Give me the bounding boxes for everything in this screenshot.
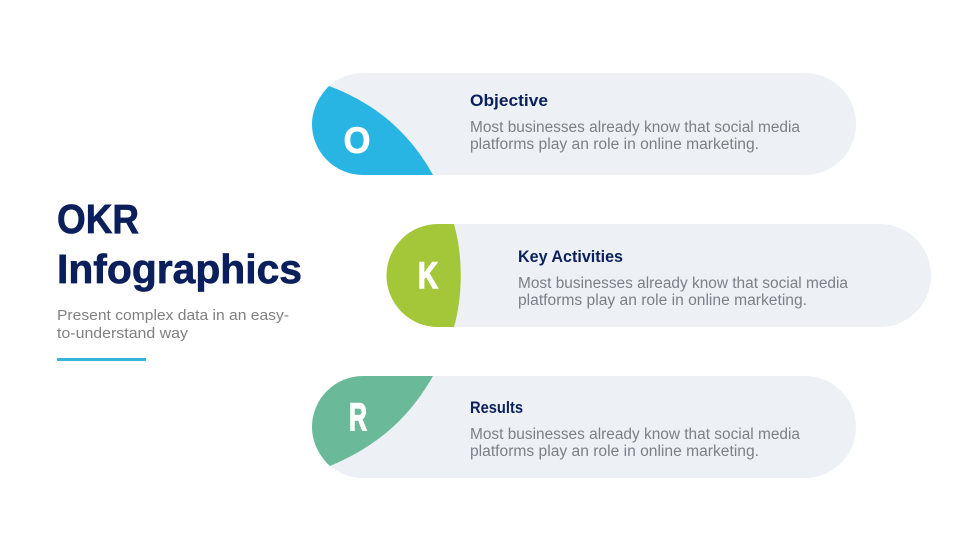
body text: objective: Most businesses already know that social media [470, 119, 800, 136]
panel: key activities [386, 224, 931, 327]
icon: K segment [386, 224, 461, 327]
body text: results [470, 426, 800, 460]
icon: R segment [312, 376, 433, 466]
accent underline [57, 358, 146, 361]
title [57, 196, 302, 292]
body text: results: platforms play an role in online marketing. [470, 443, 759, 460]
body text: objective [470, 119, 800, 153]
body text: key activities: platforms play an role in online marketing. [518, 292, 807, 309]
pill background: results [312, 376, 856, 478]
panel: results [312, 376, 856, 478]
panel: objective [312, 73, 856, 175]
body text: key activities [518, 275, 848, 309]
icon: O segment [312, 86, 433, 175]
pill background: key activities [387, 224, 931, 327]
subtitle [57, 307, 289, 342]
pill background: objective [312, 73, 856, 175]
body text: key activities: Most businesses already know that social media [518, 275, 848, 292]
letter R: R [349, 396, 367, 439]
letter K: K [418, 255, 438, 296]
subtitle: Present complex data in an easy- [57, 307, 289, 324]
heading: objective: Objective [470, 91, 548, 110]
heading: results: Results [470, 398, 523, 417]
letter O: O [344, 120, 370, 161]
body text: results: Most businesses already know that social media [470, 426, 800, 443]
body text: objective: platforms play an role in online marketing. [470, 136, 759, 153]
subtitle: to-understand way [57, 325, 189, 342]
heading: key activities: Key Activities [518, 247, 623, 266]
title: Infographics [57, 246, 302, 292]
title: OKR [57, 196, 139, 242]
